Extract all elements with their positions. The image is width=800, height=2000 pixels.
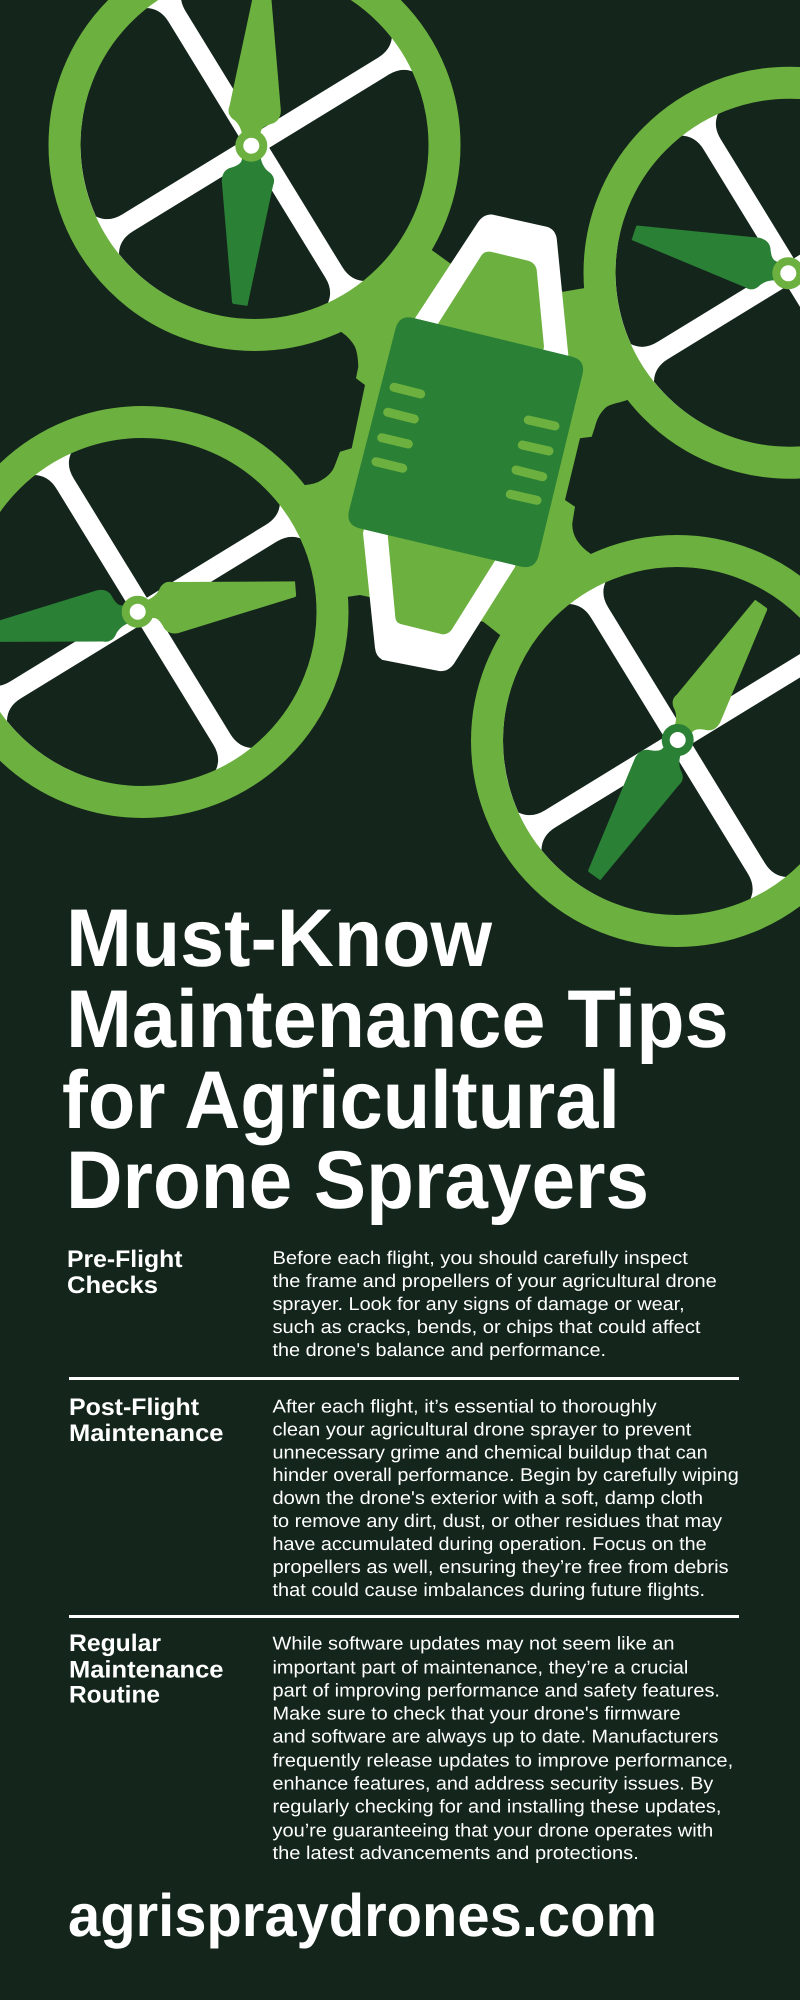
heading: pre-flight checks xyxy=(67,1246,183,1299)
control box xyxy=(348,317,583,567)
body text: post-flight maintenance: down the drone's exterior with a soft, damp cloth xyxy=(272,1487,703,1508)
heading: regular maintenance routine: Maintenance xyxy=(69,1656,224,1683)
body text: regular maintenance routine: frequently release updates to improve performance, xyxy=(272,1749,733,1770)
heading: post-flight maintenance: Maintenance xyxy=(69,1420,224,1447)
body text: pre-flight checks: the drone's balance and performance. xyxy=(272,1339,606,1360)
heading: post-flight maintenance xyxy=(69,1394,224,1447)
title: Maintenance Tips xyxy=(66,974,729,1065)
rotor: top left xyxy=(17,0,494,383)
title xyxy=(62,893,729,1226)
body text: post-flight maintenance: that could cause imbalances during future flights. xyxy=(272,1579,705,1600)
body text: regular maintenance routine: and software are always up to date. Manufacturers xyxy=(272,1726,718,1747)
drone arms frame xyxy=(300,200,640,635)
heading: regular maintenance routine: Regular xyxy=(69,1630,161,1657)
body text: regular maintenance routine: important part of maintenance, they’re a crucial xyxy=(272,1656,688,1677)
body text: regular maintenance routine: enhance features, and address security issues. By xyxy=(272,1772,714,1793)
body text: regular maintenance routine: part of improving performance and safety features. xyxy=(272,1679,720,1700)
heading: regular maintenance routine xyxy=(69,1630,224,1708)
footer: website: agrispraydrones.com xyxy=(68,1882,657,1949)
body text: post-flight maintenance: unnecessary grime and chemical buildup that can xyxy=(272,1441,708,1462)
propeller: bottom left xyxy=(0,536,301,688)
body text: regular maintenance routine: Make sure to check that your drone's firmware xyxy=(272,1702,681,1723)
body text: post-flight maintenance: to remove any dirt, dust, or other residues that may xyxy=(272,1510,723,1531)
propeller: top right xyxy=(632,226,800,289)
rotor: top right xyxy=(552,33,800,511)
rotor: bottom left xyxy=(0,373,382,850)
body text: post-flight maintenance: hinder overall performance. Begin by carefully wiping xyxy=(272,1464,739,1485)
body text: post-flight maintenance: After each flight, it’s essential to thoroughly xyxy=(272,1395,657,1416)
propeller: bottom right xyxy=(586,585,769,895)
heading: pre-flight checks: Pre-Flight xyxy=(67,1246,183,1273)
title: for Agricultural xyxy=(62,1055,620,1146)
body text: pre-flight checks: Before each flight, you should carefully inspect xyxy=(272,1247,688,1268)
heading: regular maintenance routine: Routine xyxy=(69,1682,160,1708)
title: Must-Know xyxy=(66,893,492,984)
body text: post-flight maintenance: have accumulated during operation. Focus on the xyxy=(272,1533,707,1554)
body text: regular maintenance routine: regularly checking for and installing these updates, xyxy=(272,1796,721,1817)
section: post-flight maintenance xyxy=(69,1394,739,1600)
body text: post-flight maintenance: propellers as well, ensuring they’re free from debris xyxy=(272,1556,729,1577)
body text: pre-flight checks: sprayer. Look for any signs of damage or wear, xyxy=(272,1293,685,1314)
propeller: top left xyxy=(205,0,297,309)
body text: pre-flight checks: the frame and propellers of your agricultural drone xyxy=(272,1270,717,1291)
spray tank: white outline xyxy=(363,214,568,671)
spray tank: green inner xyxy=(388,252,544,634)
rotor: bottom right xyxy=(439,502,800,979)
body text: pre-flight checks xyxy=(272,1247,717,1360)
heading: post-flight maintenance: Post-Flight xyxy=(69,1394,199,1421)
body text: regular maintenance routine: the latest advancements and protections. xyxy=(272,1842,639,1863)
divider xyxy=(69,1377,739,1380)
body text: post-flight maintenance: clean your agricultural drone sprayer to prevent xyxy=(272,1418,691,1439)
body text: pre-flight checks: such as cracks, bends, or chips that could affect xyxy=(272,1316,700,1337)
heading: pre-flight checks: Checks xyxy=(67,1272,158,1299)
body text: regular maintenance routine xyxy=(272,1633,733,1863)
body text: post-flight maintenance xyxy=(272,1395,739,1600)
illustration: agricultural drone xyxy=(0,0,800,979)
body text: regular maintenance routine: While software updates may not seem like an xyxy=(272,1633,674,1654)
section: pre-flight checks xyxy=(67,1246,717,1360)
body text: regular maintenance routine: you’re guaranteeing that your drone operates with xyxy=(272,1819,713,1840)
title: Drone Sprayers xyxy=(66,1135,649,1226)
divider xyxy=(69,1615,739,1618)
control box vents xyxy=(376,387,555,500)
section: regular maintenance routine xyxy=(69,1630,733,1863)
